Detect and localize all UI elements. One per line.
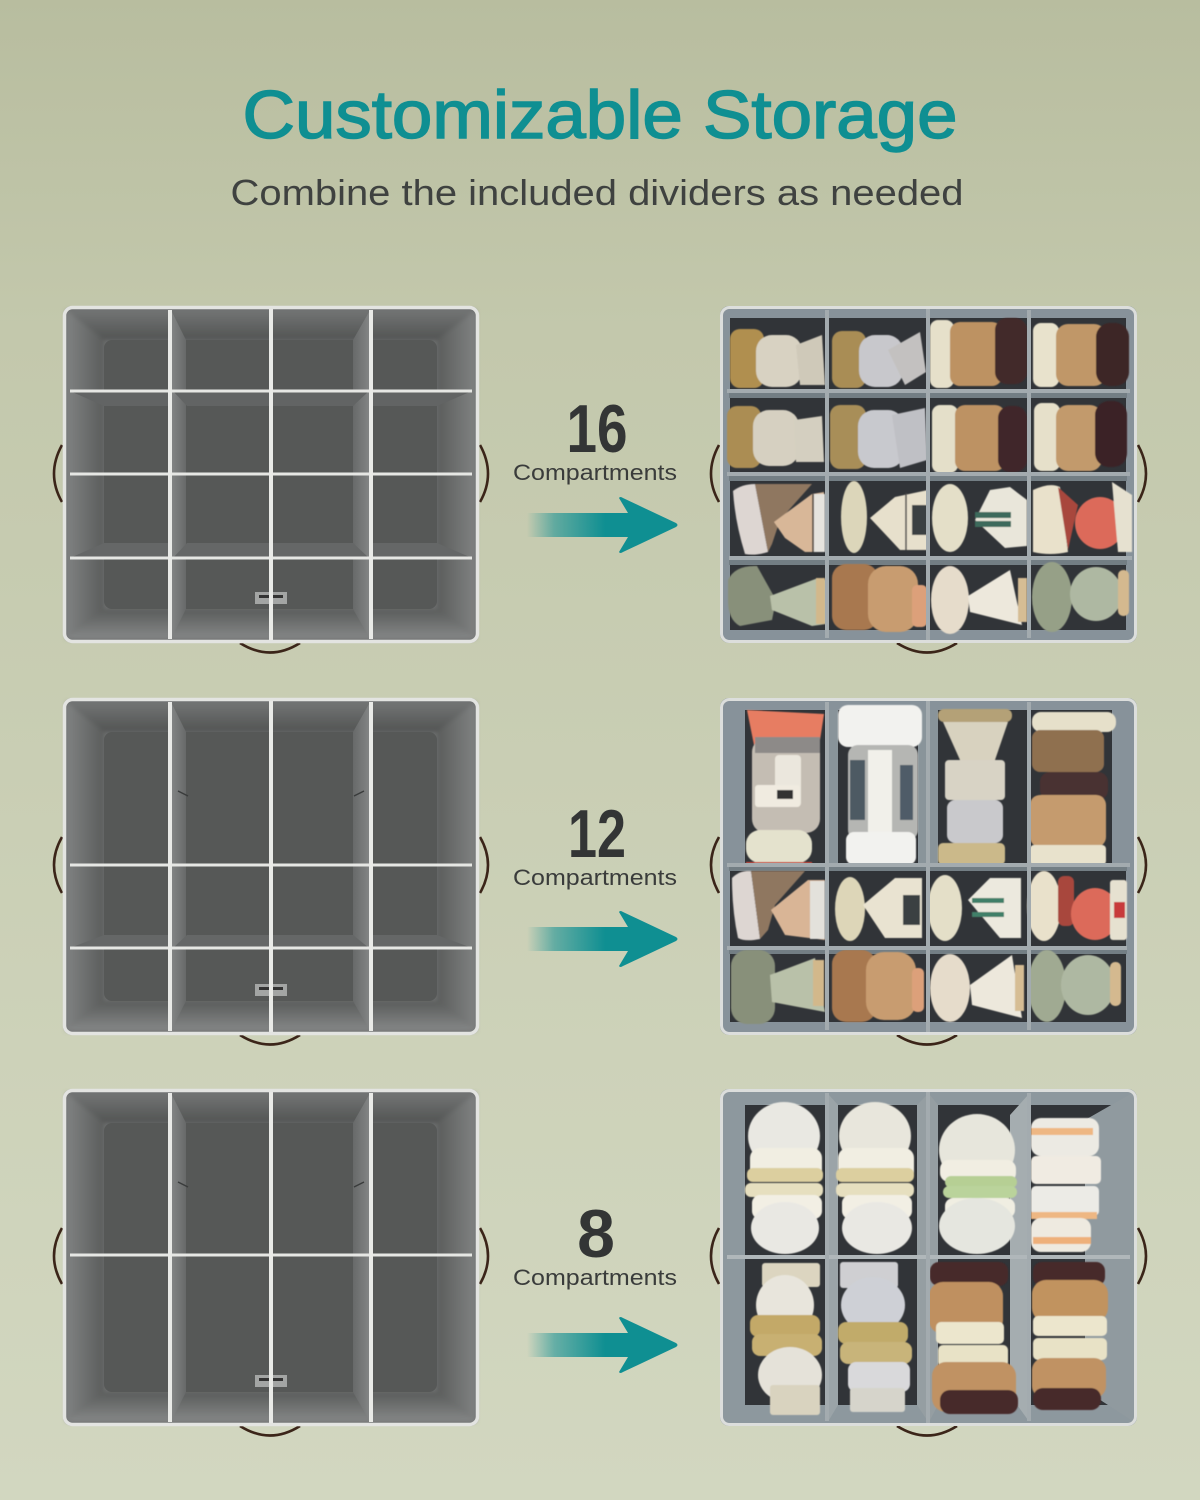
- filled box: 8 compartments: [711, 1089, 1146, 1436]
- tall shoes row: [746, 705, 1116, 865]
- sneakers and boots bottom row: [750, 1262, 1108, 1415]
- empty box: 8 compartments: [54, 1089, 488, 1436]
- filled box: 16 compartments: [711, 306, 1146, 652]
- count: 12 compartments: 12: [568, 796, 626, 872]
- subtitle: Combine the included dividers as needed: [230, 172, 964, 213]
- shoes bottom row: [731, 950, 1121, 1024]
- shoes row 3: [733, 481, 1132, 555]
- filled box: 12 compartments: [711, 698, 1146, 1044]
- count: 8 compartments: Compartments: [513, 1265, 677, 1290]
- count: 16 compartments: [513, 391, 677, 485]
- count: 12 compartments: Compartments: [513, 865, 677, 890]
- shoes row 4: [728, 562, 1129, 634]
- arrow: [527, 911, 678, 967]
- empty box: 16 compartments: [54, 306, 488, 652]
- arrow: [527, 497, 678, 553]
- shoes row 1: [730, 318, 1129, 388]
- count: 12 compartments: [513, 796, 677, 890]
- count: 16 compartments: Compartments: [513, 460, 677, 485]
- count: 8 compartments: 8: [577, 1196, 615, 1272]
- arrow: [527, 1317, 678, 1373]
- count: 8 compartments: [513, 1196, 677, 1290]
- shoes row 2: [727, 401, 1127, 473]
- title: Customizable Storage: [242, 77, 958, 153]
- shoes middle row: [732, 871, 1127, 941]
- count: 16 compartments: 16: [566, 391, 628, 467]
- empty box: 12 compartments: [54, 698, 488, 1044]
- white sneakers top row: [745, 1102, 1101, 1254]
